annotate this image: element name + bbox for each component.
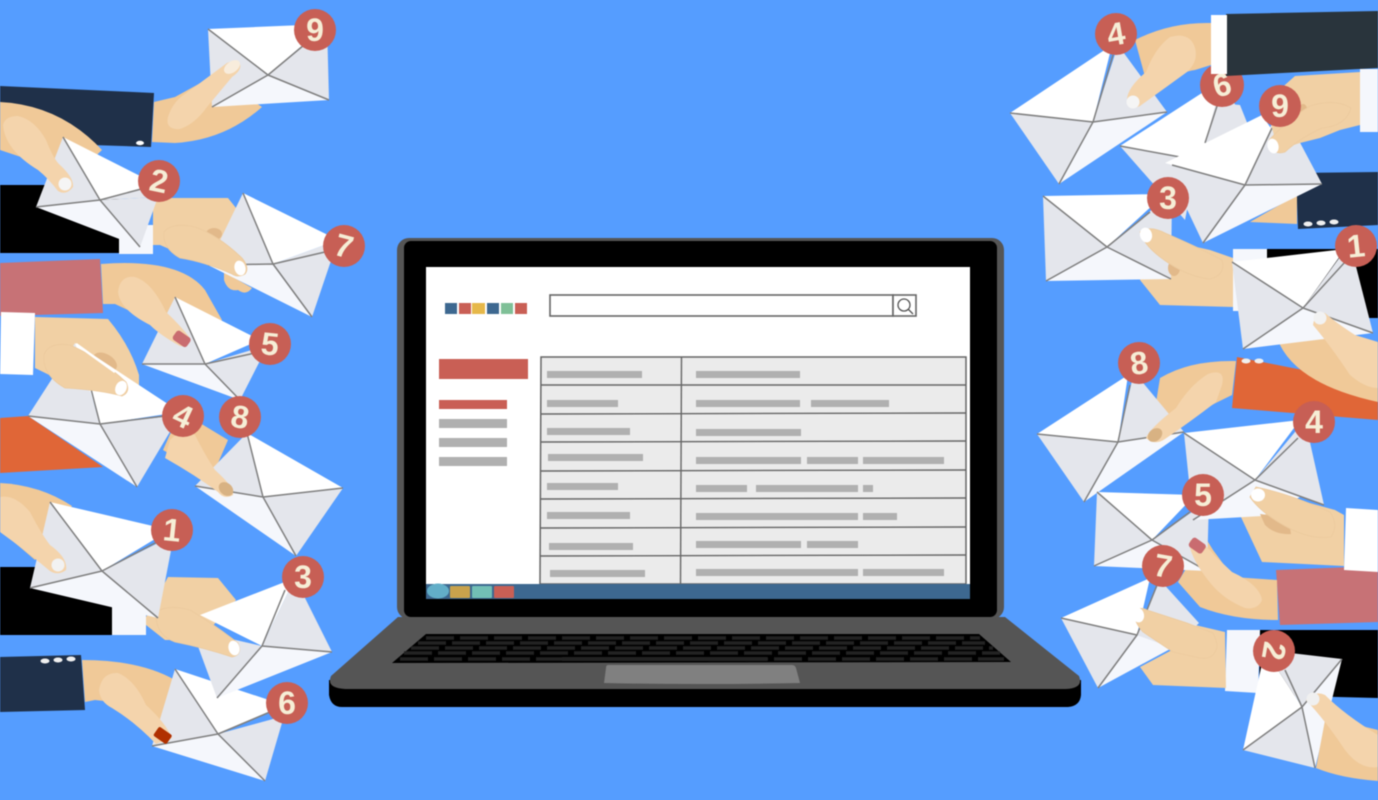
search bar (550, 295, 916, 316)
badge 5 (right): 5 (1194, 477, 1212, 513)
email table (540, 357, 966, 584)
hand with envelope 8 (left) (163, 420, 343, 556)
hand with envelope 7 (left) (0, 185, 365, 317)
right group of hands holding envelopes (1010, 11, 1378, 781)
keyboard (392, 634, 1011, 663)
hand with envelope 5 (right) (1094, 492, 1378, 625)
sidebar menu (439, 359, 528, 466)
hand with envelope 2 (right): 2 (1255, 639, 1293, 663)
hand with envelope 9 (left): 9 (306, 12, 324, 48)
hand with envelope 4 (top right): 4 (1104, 15, 1128, 53)
hand with envelope 1 (left): 1 (161, 511, 183, 549)
screen frame (397, 238, 1004, 619)
hand with envelope 9 (right) (1165, 69, 1378, 243)
hand with envelope 2 (right) (1243, 630, 1378, 781)
hand with envelope 7 (right): 7 (1151, 547, 1175, 585)
taskbar (426, 584, 970, 599)
hand with envelope 6 (right): 6 (1209, 65, 1235, 105)
hand with envelope 4 (left): 4 (167, 396, 199, 436)
logo colour squares (445, 303, 527, 314)
laptop (329, 238, 1081, 707)
screen bezel (404, 241, 997, 617)
badge 8 (left): 8 (228, 398, 252, 436)
hand with envelope 5 (left) (0, 259, 291, 400)
hand with envelope 1 (left) (0, 483, 193, 618)
hand with envelope 8 (right) (1037, 342, 1378, 502)
hand with envelope 3 (left): 3 (294, 559, 312, 595)
hand with envelope 4 (left) (0, 312, 204, 487)
hand with envelope 7 (left): 7 (331, 226, 357, 266)
laptop base underside (329, 680, 1081, 707)
hand with envelope 6 (left): 6 (278, 685, 296, 721)
hand with envelope 9 (left) (0, 9, 336, 147)
hand with envelope 6 (right) (1120, 63, 1378, 229)
hand with envelope 7 (right) (1061, 545, 1378, 698)
hand with envelope 6 (left) (0, 655, 308, 781)
trackpad (604, 665, 800, 684)
hand with envelope 8 (right): 8 (1128, 344, 1150, 382)
left group of hands holding envelopes (0, 9, 365, 781)
hand with envelope 1 (right) (1232, 225, 1378, 402)
hand with envelope 1 (right): 1 (1345, 227, 1367, 265)
hand with envelope 3 (right): 3 (1159, 180, 1177, 216)
laptop deck (330, 617, 1080, 689)
hand with envelope 2 (left): 2 (147, 162, 171, 200)
hand with envelope 9 (right): 9 (1271, 88, 1289, 124)
hand with envelope 4 (top right) (1010, 11, 1378, 184)
hand with envelope 3 (left) (0, 556, 332, 698)
hand with envelope 5 (left): 5 (259, 325, 281, 363)
badge 5 (right) (1182, 474, 1224, 516)
screen (426, 267, 970, 599)
hand with envelope 4 (lower right): 4 (1305, 404, 1323, 440)
badge 8 (left) (219, 396, 261, 438)
hand with envelope 3 (right) (1043, 177, 1378, 318)
hand with envelope 2 (left) (0, 102, 180, 247)
hand with envelope 4 (lower right) (1184, 401, 1378, 572)
